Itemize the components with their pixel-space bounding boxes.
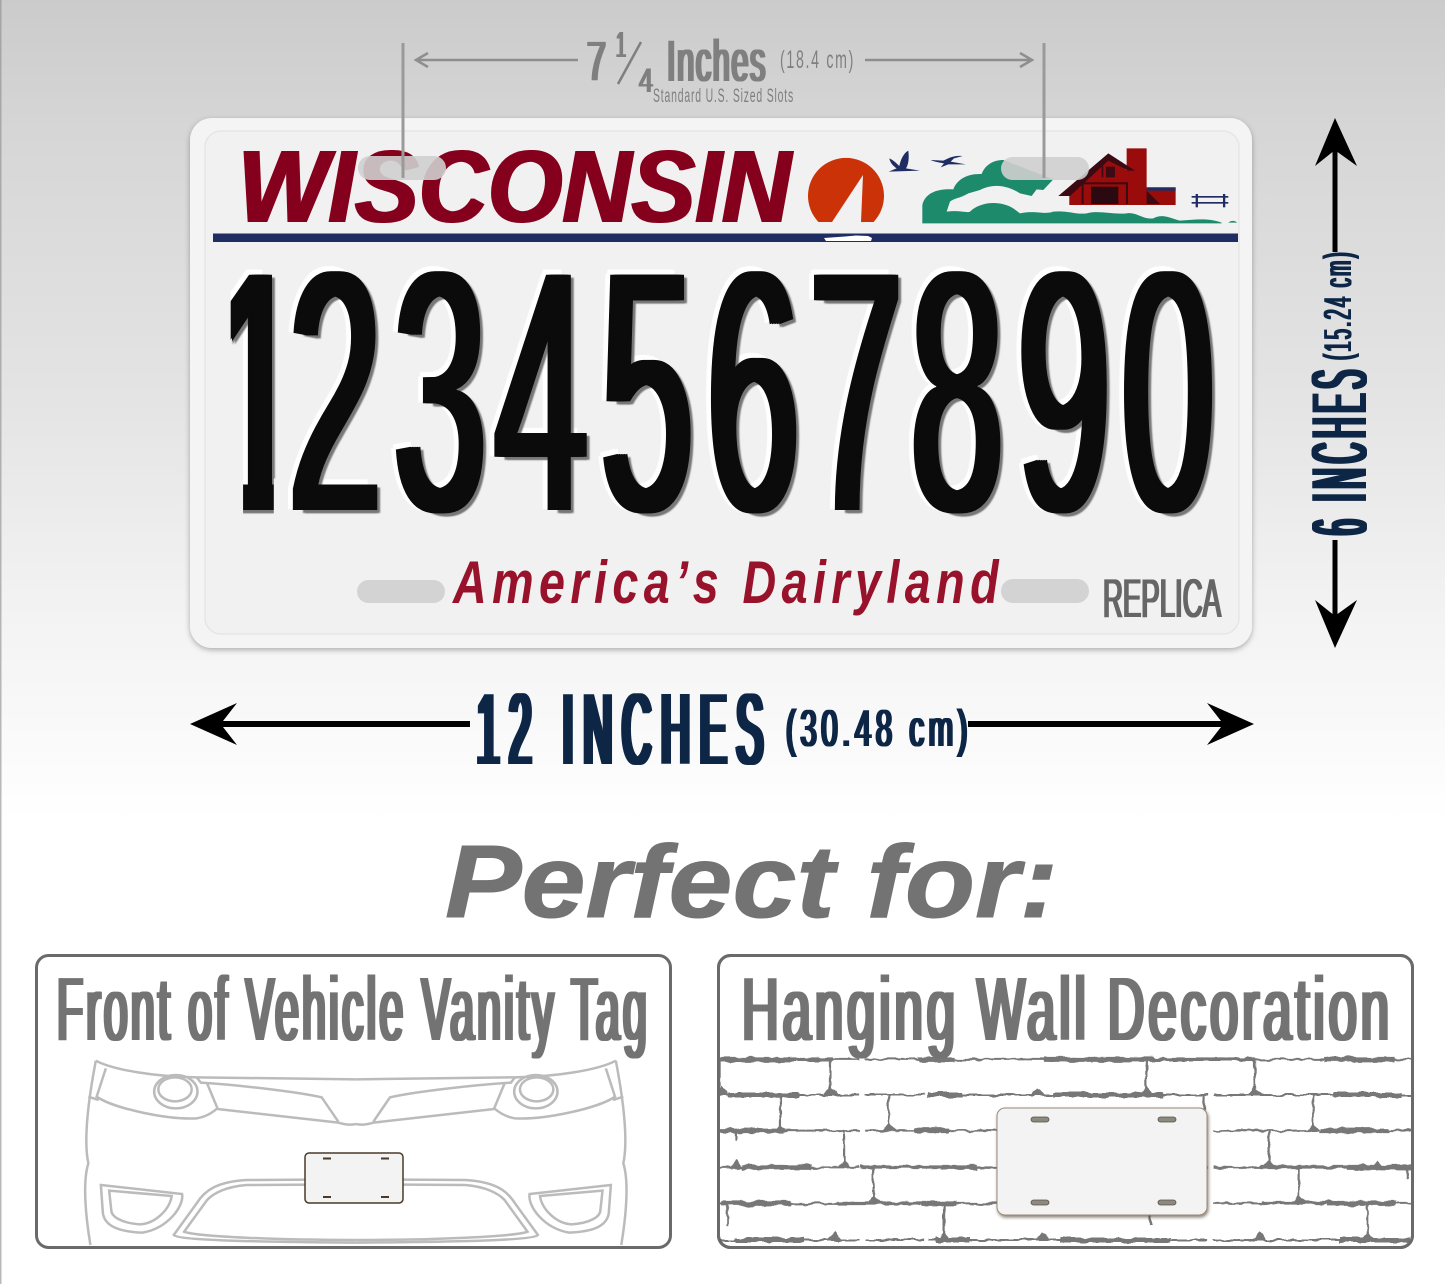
small plate on car [305, 1153, 403, 1203]
icon: birds [889, 151, 966, 172]
left edge line [0, 0, 2, 1284]
panel frame overlay [718, 956, 1412, 1248]
plate body [190, 118, 1252, 648]
icon: fence [1192, 194, 1228, 207]
slot spacing arrows [416, 53, 1032, 67]
height label: 6 INCHES [1295, 365, 1383, 535]
plate slogan: America’s Dairyland [451, 549, 1004, 616]
car front outline [85, 1061, 627, 1245]
slot spacing label: Inches [667, 29, 767, 94]
plate number: 2 [289, 200, 381, 582]
plate number: 9 [1018, 200, 1110, 582]
icon: sun with sailboat [808, 158, 884, 222]
slot spacing label: (18.4 cm) [780, 46, 855, 74]
icon: green hills [922, 160, 1237, 223]
plate divider line [213, 234, 1238, 242]
plate number [230, 200, 1216, 582]
heading: perfect for: Perfect for: [445, 824, 1058, 939]
panel: front of vehicle [36, 956, 670, 1248]
width label: (30.48 cm) [786, 700, 972, 758]
height arrow bottom [1315, 540, 1357, 648]
height dimension: (15.24 cm) [1317, 250, 1360, 360]
icon: red barn [1058, 148, 1176, 205]
plate number: 5 [601, 200, 693, 582]
slot spacing label: 7 [587, 29, 606, 92]
plate number: 7 [810, 200, 902, 582]
height label [1295, 250, 1383, 535]
plate number: 3 [394, 200, 486, 582]
brick wall [715, 1057, 1412, 1240]
replica mark: REPLICA [1103, 567, 1221, 629]
slot spacing label [587, 24, 855, 107]
slot spacing label: 4 [639, 62, 653, 100]
small plate on wall [997, 1108, 1207, 1215]
height dimension [1295, 118, 1383, 648]
text: Front of Vehicle Vanity Tag [57, 960, 650, 1060]
plate number: 0 [1122, 200, 1214, 582]
license plate [190, 118, 1252, 648]
width arrow right [968, 703, 1254, 745]
width label: 12 INCHES [477, 674, 773, 786]
slot guide lines [403, 43, 1044, 178]
mounting slots [357, 156, 1089, 603]
slot spacing dimension [403, 24, 1044, 178]
plate number: 1 [211, 200, 303, 582]
plate number: 4 [495, 200, 587, 582]
height arrow top [1315, 118, 1357, 252]
icon: boat [824, 236, 872, 241]
plate number: 6 [707, 200, 799, 582]
plate state name: WISCONSIN [238, 129, 793, 244]
slot spacing label: Standard U.S. Sized Slots [653, 86, 794, 107]
plate number: 8 [911, 200, 1003, 582]
width arrow left [190, 703, 470, 745]
slot spacing label: 1 [616, 24, 626, 65]
width dimension [190, 674, 1254, 786]
panel: hanging wall decoration [715, 956, 1412, 1248]
width label [477, 674, 972, 786]
